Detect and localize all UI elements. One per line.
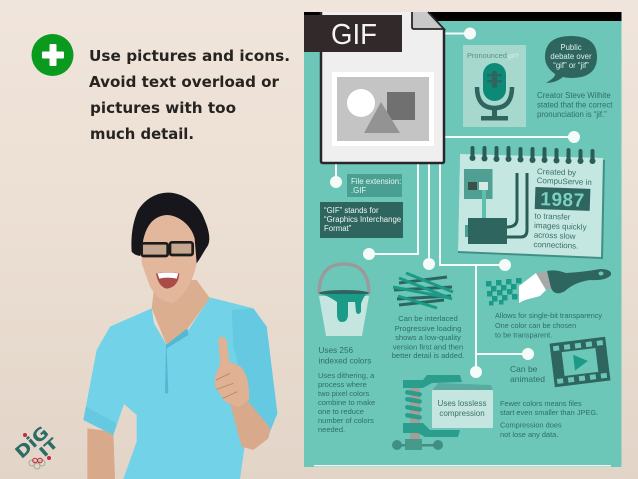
heading text: much detail. [90, 125, 194, 143]
notebook text: across slow [534, 230, 576, 241]
man's arm left [87, 428, 115, 479]
GIF label: GIF [331, 19, 377, 51]
text: transparency [495, 311, 602, 340]
text: transparency: to be transparent. [495, 330, 552, 340]
text: fewer colors: not lose any data. [500, 430, 558, 439]
panel: GIF infographic [304, 12, 622, 467]
glasses [142, 242, 193, 256]
text: interlaced: version first and then [393, 342, 463, 352]
text: uses 256 colors: needed. [318, 425, 345, 434]
text: uses 256 colors: indexed colors [318, 356, 371, 366]
text: fewer colors: start even smaller than JPEG. [500, 408, 598, 417]
text: transparency: One color can be chosen [495, 321, 576, 330]
panel: pronounced mic: Pronounced [467, 51, 507, 60]
GIF label [304, 15, 402, 52]
text: uses 256 colors: combine to make [318, 398, 375, 407]
network ports [464, 169, 492, 219]
text: uses 256 colors: number of colors [318, 416, 374, 425]
heading text [89, 47, 290, 143]
icon: paint bucket [319, 264, 369, 336]
text: uses 256 colors: Uses dithering, a [318, 371, 375, 380]
icon: GIF document [321, 12, 444, 163]
text: interlaced: Progressive loading [395, 324, 461, 333]
text: fewer colors: Fewer colors means files [500, 399, 582, 408]
text: interlaced: better detail is added. [392, 351, 464, 360]
speech bubble: debate over [550, 52, 592, 61]
text: uses 256 colors [318, 346, 375, 434]
text: uses 256 colors: process where [318, 380, 367, 389]
neck [152, 280, 210, 345]
face [142, 215, 197, 303]
notebook text: 1987 [540, 189, 585, 212]
heading text: pictures with too [90, 99, 236, 117]
forearm [230, 402, 271, 450]
hair [131, 193, 209, 263]
text: creator: pronunciation is “jif.” [537, 110, 607, 119]
heading text: Avoid text overload or [89, 73, 279, 91]
callout: GIF stands for [320, 202, 403, 238]
panel: pronounced mic [463, 45, 526, 127]
text: uses 256 colors: two pixel colors [318, 389, 370, 398]
handle [397, 444, 438, 446]
shirt [83, 297, 277, 479]
speech bubble [545, 36, 597, 83]
callout: file extension [347, 174, 402, 197]
callout: file extension: File extension: [351, 177, 401, 186]
black top bar [304, 12, 622, 21]
notebook text: to transfer [534, 211, 571, 222]
text: fewer colors [500, 399, 598, 439]
heading text: Use pictures and icons. [89, 47, 290, 65]
panel: notebook 1987 [458, 146, 605, 259]
collar placket [165, 328, 188, 393]
text: fewer colors: Compression does [500, 420, 562, 430]
notebook text: Created by [537, 167, 576, 177]
logo: Dig IT: DiG [12, 423, 53, 463]
icon: film strip [550, 337, 610, 387]
callout: GIF stands for: “GIF” stands for [324, 206, 379, 215]
text: transparency: Allows for single-bit transparency [495, 311, 602, 320]
notebook text: CompuServe in [537, 176, 592, 187]
logo: Dig IT [12, 422, 62, 473]
text: uses 256 colors: Uses 256 [318, 346, 354, 355]
icon: clamp with lossless box: compression [439, 409, 485, 418]
text: can be animated: animated [510, 374, 545, 384]
photo: smiling man with thumbs up [83, 193, 277, 479]
checker pattern [486, 278, 522, 306]
text: can be animated [510, 364, 545, 384]
notebook text [533, 167, 592, 251]
text: interlaced [392, 314, 464, 360]
mouth [156, 272, 179, 289]
icon: interlaced strips [393, 273, 453, 308]
text: uses 256 colors: one to reduce [318, 407, 364, 416]
logo: Dig IT: IT [36, 435, 62, 461]
panel: pronounced mic: gif? [508, 53, 519, 60]
icon: microphone [477, 63, 512, 120]
text: interlaced: Can be interlaced [398, 314, 458, 323]
icon: clamp with lossless box [392, 375, 493, 450]
hand thumbs up [215, 337, 249, 407]
icon: green plus [32, 34, 74, 76]
text: interlaced: shows a low-quality [395, 333, 461, 342]
text: can be animated: Can be [510, 364, 538, 374]
text: creator: Creator Steve Wilhite [537, 91, 611, 100]
connector lines [330, 28, 580, 378]
icon: clamp with lossless box: Uses lossless [438, 399, 486, 408]
notebook text: connections. [533, 240, 578, 251]
computer block [465, 173, 527, 244]
callout: GIF stands for: Format” [324, 224, 352, 233]
text: creator: stated that the correct [537, 100, 613, 110]
bottom white line [314, 465, 611, 466]
icon: paintbrush [486, 269, 611, 306]
text: creator [537, 91, 613, 119]
speech bubble: Public [560, 43, 582, 52]
jaws [403, 375, 462, 388]
teal panel [304, 12, 622, 467]
screw [410, 388, 420, 440]
notebook rings [470, 146, 596, 164]
notebook text: images quickly [534, 221, 587, 232]
speech bubble: “gif” or “jif” [553, 61, 589, 70]
callout: GIF stands for: “Graphics Interchange [324, 215, 401, 224]
compressed box [432, 383, 493, 391]
callout: file extension: .GIF [351, 186, 366, 195]
